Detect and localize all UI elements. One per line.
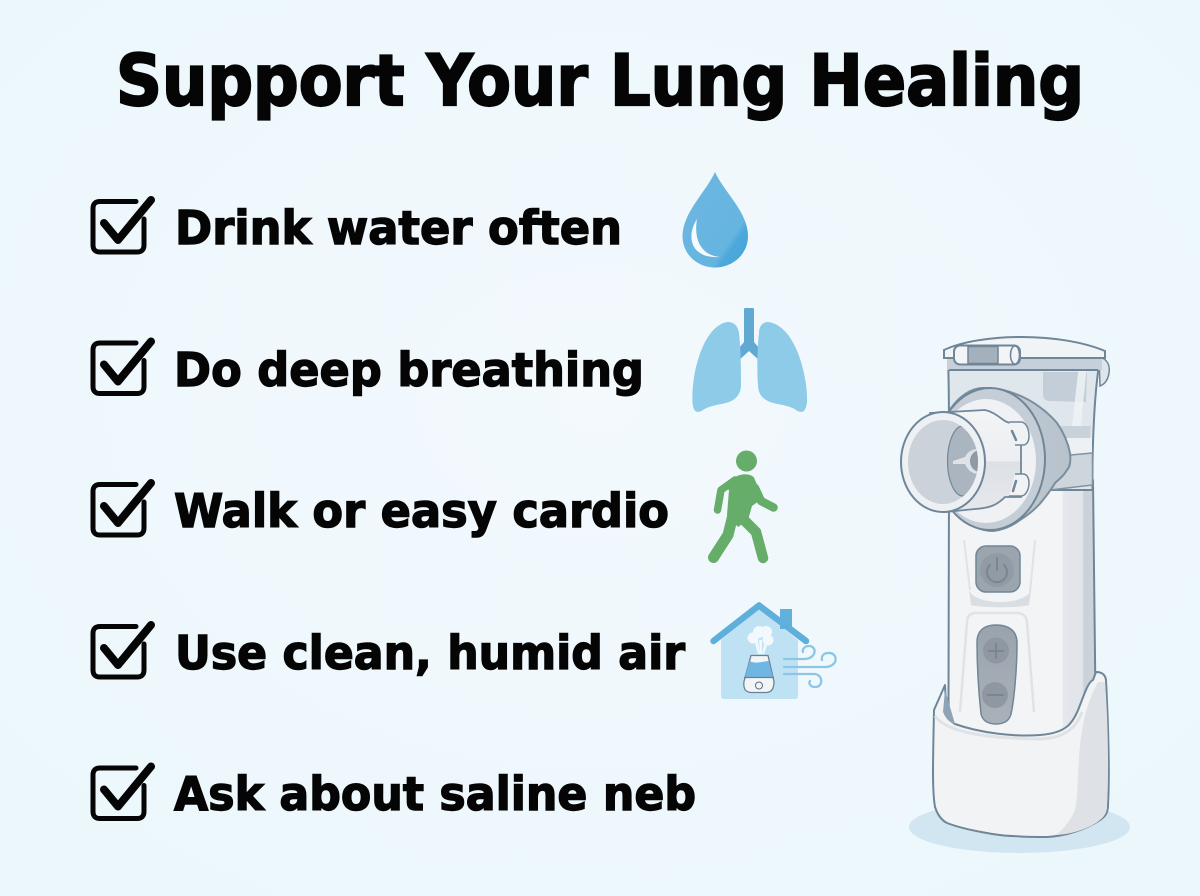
icon: water drop (682, 172, 748, 268)
icon: lungs (692, 308, 807, 412)
icon: checkbox 5 (93, 766, 151, 818)
infographic canvas (90, 50, 1130, 853)
icon: checkbox 4 (93, 625, 151, 677)
mouthpiece tube (930, 410, 1021, 512)
icon: house with humidifier and breeze (714, 606, 836, 699)
illustration: handheld mesh nebulizer (901, 337, 1130, 853)
power button (964, 540, 1035, 607)
checklist item: saline neb (93, 766, 696, 821)
mouthpiece opening (901, 412, 985, 512)
label: walk or cardio: Walk or easy cardio (174, 484, 669, 538)
label: clean humid air: Use clean, humid air (175, 626, 685, 680)
mouthpiece ring (901, 388, 1070, 531)
icon: checkbox 2 (93, 342, 151, 394)
collar band (1050, 453, 1092, 490)
medication cup (948, 360, 1100, 490)
plus minus buttons (960, 613, 1034, 724)
checklist item: clean humid air (93, 625, 685, 680)
nebulizer main body (948, 480, 1096, 738)
label: saline neb: Ask about saline neb (174, 767, 696, 821)
checklist item: walk or cardio (93, 483, 669, 538)
icon: checkbox 3 (93, 483, 151, 535)
nebulizer base shadow (909, 801, 1130, 853)
clips (1009, 422, 1029, 445)
label: deep breathing: Do deep breathing (174, 343, 644, 397)
checklist item: deep breathing (93, 342, 644, 397)
icon: checkbox 1 (93, 200, 151, 252)
icon: walking person (714, 450, 774, 558)
label: drink water often: Drink water often (175, 201, 622, 255)
lid with hinge (944, 337, 1105, 370)
title: Support Your Lung Healing (116, 40, 1084, 122)
charging cradle (933, 672, 1109, 837)
checklist item: drink water often (93, 200, 622, 255)
